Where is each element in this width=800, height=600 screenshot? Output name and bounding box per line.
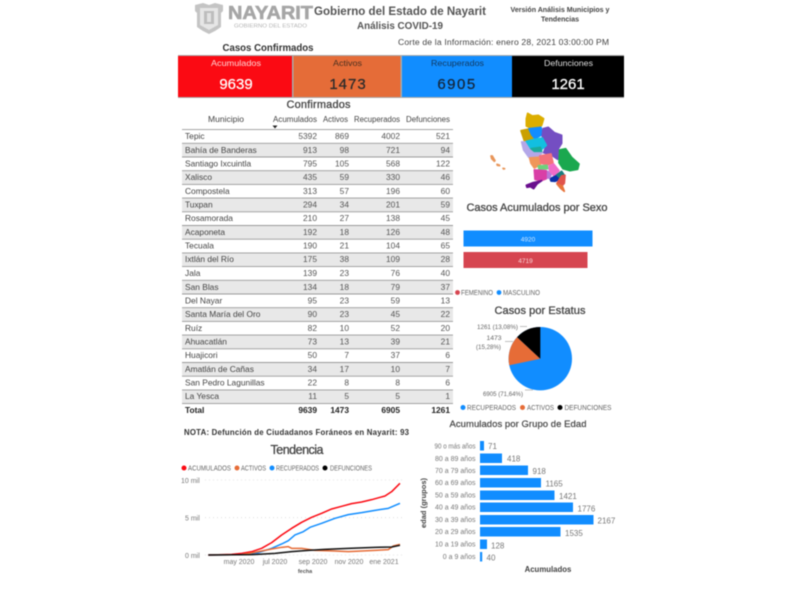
age: 60 a 69 (435, 478, 563, 488)
map of Nayarit (491, 113, 579, 191)
row: Bahia de Banderas: 98 (340, 145, 349, 155)
line: recuperados (208, 503, 400, 555)
age: 0 a 9: 40 (486, 554, 496, 562)
legend: tendencia: ACUMULADOS (188, 464, 231, 472)
row: Ruiz (185, 323, 450, 333)
card: acumulados: Acumulados (211, 58, 261, 68)
header logo: NAYARIT (228, 2, 314, 23)
bar chart: sexo (464, 230, 592, 268)
row: Compostela: 196 (386, 186, 400, 196)
label: activos: 1473 (486, 335, 502, 342)
pie chart: estatus (476, 324, 572, 398)
row: Tepic: Tepic (185, 131, 205, 141)
age: 80 a 89 (435, 454, 521, 464)
row: Acaponeta: Acaponeta (185, 227, 225, 237)
age: 60 a 69: 60 a 69 años (435, 480, 476, 487)
card: activos (294, 56, 400, 97)
row: Huajicori: 37 (391, 350, 400, 360)
row: Rosamorada: 27 (340, 213, 349, 223)
row: Ruiz: 52 (391, 323, 400, 333)
card: defunciones: 1261 (551, 76, 585, 93)
row: La Yesca: 11 (308, 391, 317, 401)
row: Ahuacatlan: 73 (308, 336, 317, 346)
row: Bahia de Banderas: Bahía de Banderas (185, 145, 257, 155)
row: La Yesca (185, 391, 450, 401)
card: defunciones (512, 56, 624, 97)
table header: Municipio (208, 115, 245, 124)
version note (510, 7, 610, 24)
heading: casos por sexo: Casos Acumulados por Sexo (466, 202, 608, 214)
card: defunciones: Defunciones (544, 58, 593, 68)
row: Bahia de Banderas: 721 (386, 145, 400, 155)
row: Santa Maria del Oro: 90 (308, 309, 317, 319)
row: Tuxpan: 34 (340, 200, 349, 210)
legend: sexo (455, 288, 540, 297)
bar chart: grupo de edad (419, 441, 616, 574)
row: Tepic: 869 (335, 131, 349, 141)
row: Acaponeta: 126 (386, 227, 400, 237)
row: San Blas: 37 (441, 282, 450, 292)
cut-off date: Corte de la Información: enero 28, 2021 03:00:00 PM (398, 37, 609, 47)
row: Del Nayar: 23 (340, 296, 349, 306)
header title: Análisis COVID-19 (357, 21, 443, 32)
table: municipios (182, 115, 453, 415)
row: Amatlan de Canas: 10 (391, 364, 400, 374)
row: Santiago Ixcuintla (185, 158, 450, 168)
row: Rosamorada (185, 213, 450, 223)
row: La Yesca: 1 (445, 391, 450, 401)
row: San Blas: 134 (303, 282, 317, 292)
heading: casos confirmados: Casos Confirmados (222, 43, 314, 54)
header title (314, 4, 486, 32)
note: NOTA: Defunción de Ciudadanos Foráneos en Nayarit: 93 (184, 428, 410, 437)
legend: sexo: FEMENINO (461, 288, 493, 297)
row: Santiago Ixcuintla: 122 (436, 158, 450, 168)
x axis labels: may 2020 (224, 559, 254, 566)
line: defunciones (208, 545, 400, 555)
row: Tuxpan: 294 (303, 200, 317, 210)
row: Ahuacatlan: 13 (340, 336, 349, 346)
row: Ixtlan del Rio: 109 (386, 254, 400, 264)
row: Tuxpan: 59 (441, 200, 450, 210)
age: 70 a 79: 70 a 79 años (435, 468, 476, 475)
row: Jala: 76 (391, 268, 400, 278)
row: Amatlan de Canas: 17 (340, 364, 349, 374)
age: 30 a 39: 30 a 39 años (435, 517, 476, 524)
row: Rosamorada: 210 (303, 213, 317, 223)
row: Santiago Ixcuintla: 568 (386, 158, 400, 168)
row: Ixtlan del Rio: Ixtlán del Río (185, 254, 234, 264)
row: Ruiz: Ruíz (185, 323, 202, 333)
row: Tecuala (185, 240, 450, 250)
row: Tepic: 521 (436, 131, 450, 141)
row: Rosamorada: 45 (441, 213, 450, 223)
heading: confirmados: Confirmados (286, 99, 351, 111)
row: Total: 1261 (431, 405, 450, 415)
row: Total: 9639 (298, 405, 317, 415)
row: Compostela: 60 (441, 186, 450, 196)
age: 10 a 19 (435, 540, 505, 550)
table header: Acumulados (273, 115, 317, 124)
row: Santa Maria del Oro: Santa María del Oro (185, 309, 261, 319)
card: activos: Activos (333, 58, 362, 68)
row: Jala: Jala (185, 268, 201, 278)
row: Ahuacatlan: 21 (441, 336, 450, 346)
row: Jala (185, 268, 450, 278)
age: 80 a 89: 80 a 89 años (435, 456, 476, 463)
row: Tuxpan: 201 (386, 200, 400, 210)
row: Ixtlan del Rio: 38 (340, 254, 349, 264)
row: Acaponeta (185, 227, 450, 237)
row: Total: 1473 (330, 405, 349, 415)
age: 30 a 39 (435, 515, 616, 526)
row: Rosamorada: Rosamorada (185, 213, 233, 223)
row: Jala: 40 (441, 268, 450, 278)
row: Amatlan de Canas: 7 (445, 364, 450, 374)
row: Acaponeta: 48 (441, 227, 450, 237)
row: San Blas: 18 (340, 282, 349, 292)
row: Ruiz: 10 (340, 323, 349, 333)
age: 20 a 29 (435, 527, 583, 538)
row: Bahia de Banderas: 913 (303, 145, 317, 155)
label: activos: (15,28%) (476, 344, 501, 351)
table header (208, 115, 450, 128)
line: activos (208, 544, 400, 555)
row: Xalisco: 435 (303, 172, 317, 182)
row: San Pedro Lagunillas: 8 (344, 378, 349, 388)
legend: tendencia: DEFUNCIONES (330, 464, 372, 472)
row: Ixtlan del Rio: 28 (441, 254, 450, 264)
age: 30 a 39: 2167 (598, 516, 616, 526)
row: Del Nayar: Del Nayar (185, 296, 222, 306)
age: 0 a 9 (443, 552, 496, 562)
row: San Blas: 79 (391, 282, 400, 292)
line chart: tendencia (181, 478, 402, 575)
axis title: edad (grupos) (419, 477, 428, 528)
row: Compostela (185, 186, 450, 196)
row: Del Nayar: 59 (391, 296, 400, 306)
version note: Tendencias (541, 16, 579, 24)
row: Del Nayar (185, 296, 450, 306)
age: 90 o mas: 90 o más años (434, 444, 476, 450)
row: Tuxpan: Tuxpan (185, 200, 213, 210)
card: acumulados: 9639 (219, 76, 253, 93)
row: Compostela: 57 (340, 186, 349, 196)
row: San Pedro Lagunillas: San Pedro Lagunillas (185, 378, 265, 388)
label: activos (476, 335, 502, 351)
row: Xalisco: 59 (340, 172, 349, 182)
row: San Pedro Lagunillas: 6 (445, 378, 450, 388)
header logo (195, 2, 314, 34)
row: Santa Maria del Oro: 23 (340, 309, 349, 319)
row: San Blas: San Blas (185, 282, 219, 292)
row: Santa Maria del Oro: 45 (391, 309, 400, 319)
heading: casos por estatus: Casos por Estatus (494, 305, 586, 317)
card: recuperados (402, 56, 512, 97)
x axis labels: jul 2020 (262, 559, 287, 566)
age: 10 a 19: 128 (491, 542, 505, 550)
age: 90 o mas: 71 (488, 442, 497, 451)
row: Huajicori: 50 (308, 350, 317, 360)
x axis labels: ene 2021 (369, 559, 399, 566)
row: Huajicori: Huajicori (185, 350, 218, 360)
version note: Versión Análisis Municipios y (510, 7, 610, 14)
row: Xalisco: 46 (441, 172, 450, 182)
row: Tepic: 4002 (381, 131, 400, 141)
age: 50 a 59 (435, 490, 577, 501)
zebra rows (182, 143, 453, 404)
row: Tecuala: 190 (303, 240, 317, 250)
row: Acaponeta: 18 (340, 227, 349, 237)
row: Santiago Ixcuintla: 795 (303, 158, 317, 168)
bar: femenino: 4719 (518, 258, 533, 265)
legend: tendencia: RECUPERADOS (276, 464, 319, 472)
row: Del Nayar: 95 (308, 296, 317, 306)
table header: Activos (323, 115, 348, 124)
row: Total: Total (185, 405, 204, 415)
row: Ahuacatlan: 39 (391, 336, 400, 346)
age: 60 a 69: 1165 (546, 480, 563, 488)
age: 10 a 19: 10 a 19 años (435, 542, 476, 548)
age: 40 a 49 (435, 502, 596, 514)
row: Ixtlan del Rio: 175 (303, 254, 317, 264)
row: La Yesca: La Yesca (185, 391, 219, 401)
row: Rosamorada: 138 (386, 213, 400, 223)
icon: state crest (195, 3, 223, 34)
age: 70 a 79: 918 (532, 467, 546, 476)
x axis labels: fecha (298, 569, 313, 575)
y axis labels (181, 478, 200, 560)
row: Jala: 23 (340, 268, 349, 278)
heading: grupo de edad: Acumulados por Grupo de Edad (450, 419, 586, 430)
x axis labels (224, 559, 399, 575)
row: Xalisco: 330 (386, 172, 400, 182)
legend: sexo: MASCULINO (503, 288, 540, 297)
row: Ahuacatlan (185, 336, 450, 346)
age: 40 a 49: 1776 (578, 504, 596, 514)
card: acumulados (178, 56, 292, 97)
row: Santa Maria del Oro: 22 (441, 309, 450, 319)
row: San Pedro Lagunillas (185, 378, 450, 388)
y axis labels: 0 mil (185, 553, 200, 560)
KPI cards (178, 55, 624, 98)
age: 0 a 9: 0 a 9 años (443, 554, 476, 561)
row: Ruiz: 82 (308, 323, 317, 333)
row: Amatlan de Canas: Amatlán de Cañas (185, 364, 254, 374)
row: Xalisco: Xalisco (185, 172, 212, 182)
row: Santiago Ixcuintla: Santiago Ixcuintla (185, 158, 251, 168)
row: San Pedro Lagunillas: 8 (395, 378, 400, 388)
row: Ahuacatlan: Ahuacatlán (185, 336, 227, 346)
row: Santa Maria del Oro (185, 309, 450, 319)
age: 20 a 29: 1535 (565, 529, 583, 538)
row: Tecuala: 104 (386, 240, 400, 250)
age: 90 o mas (434, 441, 497, 451)
row: Huajicori (185, 350, 450, 360)
age: 70 a 79 (435, 466, 546, 476)
label: defunciones: 1261 (13,08%) (477, 324, 518, 331)
row: Total (185, 405, 450, 415)
row: Tecuala: 65 (441, 240, 450, 250)
legend: estatus: ACTIVOS (527, 403, 554, 412)
age: 40 a 49: 40 a 49 años (435, 504, 476, 512)
axis title: Acumulados (525, 565, 572, 574)
card: activos: 1473 (329, 76, 367, 93)
row: Del Nayar: 13 (441, 296, 450, 306)
age: 50 a 59: 50 a 59 años (435, 492, 476, 500)
legend: estatus (460, 403, 612, 412)
heading: tendencia: Tendencia (270, 443, 324, 457)
y axis labels: 10 mil (181, 478, 200, 485)
row: Huajicori: 7 (344, 350, 349, 360)
y axis labels: 5 mil (185, 516, 200, 522)
row: Santiago Ixcuintla: 105 (335, 158, 349, 168)
age: 20 a 29: 20 a 29 años (435, 529, 476, 536)
x axis labels: nov 2020 (335, 559, 364, 566)
header title: Gobierno del Estado de Nayarit (314, 4, 486, 18)
row: Tepic (185, 131, 450, 141)
header logo: GOBIERNO DEL ESTADO (234, 24, 308, 30)
row: Ruiz: 20 (441, 323, 450, 333)
row: Jala: 139 (303, 268, 317, 278)
row: Tecuala: Tecuala (185, 240, 214, 250)
row: Tuxpan (185, 200, 450, 210)
row: Total: 6905 (381, 405, 400, 415)
table header: Defunciones (406, 115, 450, 124)
row: La Yesca: 5 (395, 391, 400, 401)
age: 80 a 89: 418 (507, 454, 521, 464)
legend: estatus: RECUPERADOS (467, 403, 516, 412)
row: La Yesca: 5 (344, 391, 349, 401)
age: 50 a 59: 1421 (559, 492, 577, 501)
legend: tendencia (182, 464, 372, 472)
row: Acaponeta: 192 (303, 227, 317, 237)
card: recuperados: 6905 (437, 76, 477, 93)
row: Huajicori: 6 (445, 350, 450, 360)
bar: masculino: 4920 (521, 236, 536, 244)
row: Amatlan de Canas: 34 (308, 364, 317, 374)
row: San Pedro Lagunillas: 22 (308, 378, 317, 388)
row: Tecuala: 21 (340, 240, 349, 250)
label: recuperados: 6905 (71,64%) (483, 391, 523, 398)
legend: estatus: DEFUNCIONES (564, 403, 612, 412)
row: Compostela: 313 (303, 186, 317, 196)
row: Tepic: 5392 (298, 131, 317, 141)
legend: tendencia: ACTIVOS (241, 464, 266, 472)
row: Xalisco (185, 172, 450, 182)
row: Bahia de Banderas: 94 (441, 145, 450, 155)
x axis labels: sep 2020 (299, 559, 328, 566)
row: Compostela: Compostela (185, 186, 230, 196)
line: acumulados (208, 483, 400, 555)
row: San Blas (185, 282, 450, 292)
row: Bahia de Banderas (185, 145, 450, 155)
row: Amatlan de Canas (185, 364, 450, 374)
table header: Recuperados (354, 115, 400, 124)
row: Ixtlan del Rio (185, 254, 450, 264)
card: recuperados: Recuperados (431, 58, 484, 68)
